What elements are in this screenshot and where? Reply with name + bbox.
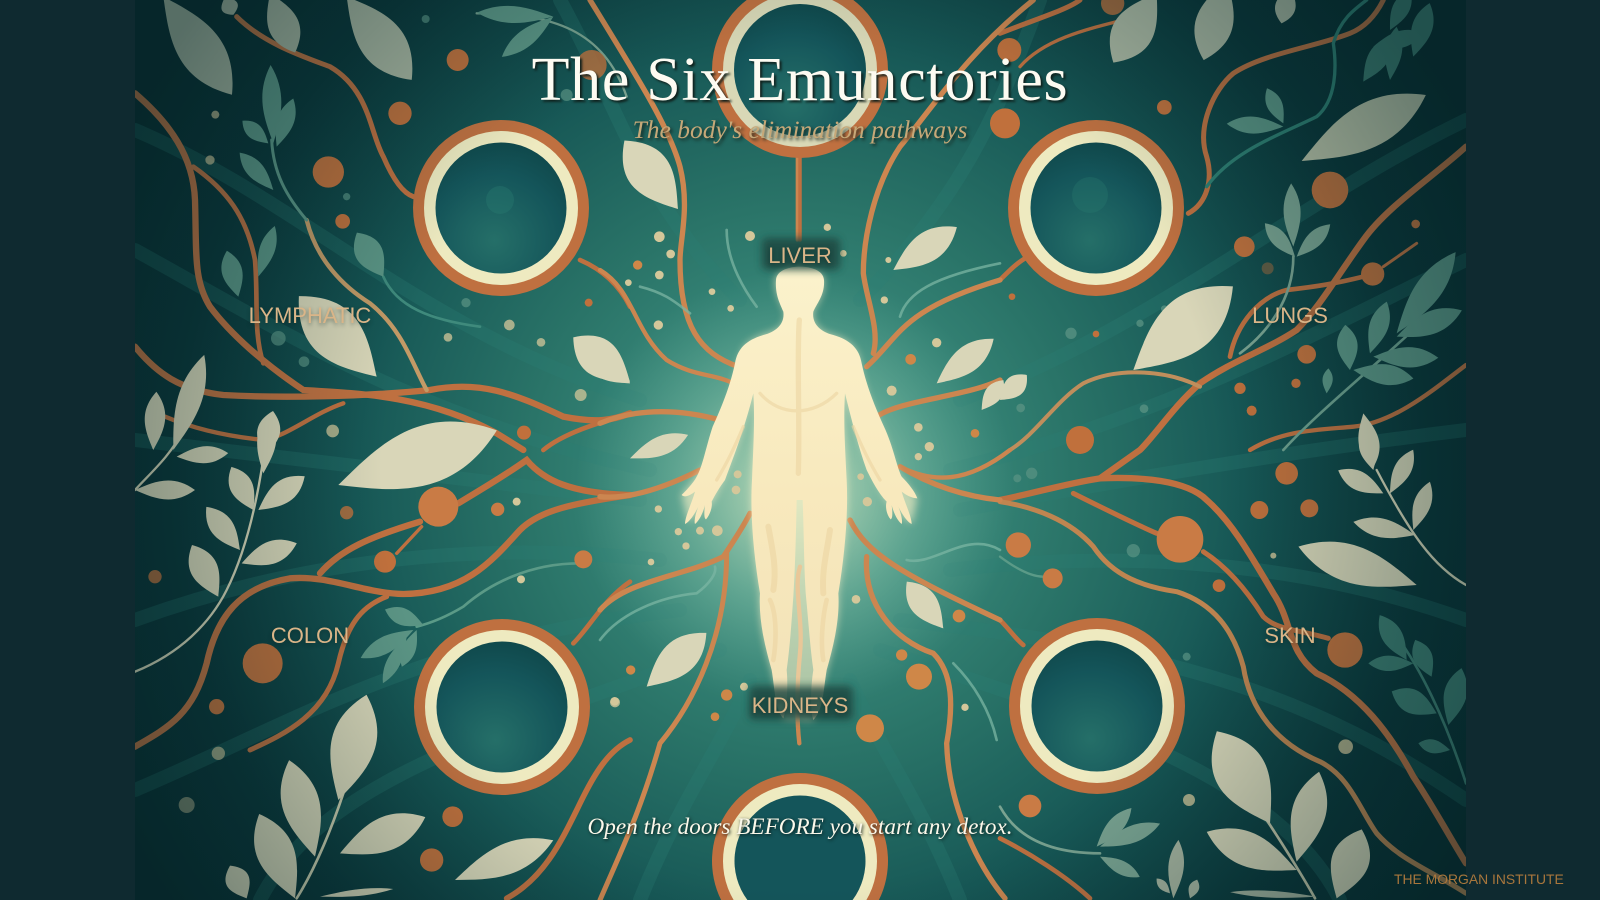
title: The Six Emunctories bbox=[532, 46, 1068, 114]
footer credit: THE MORGAN INSTITUTE bbox=[1394, 871, 1564, 887]
ring: top centre bbox=[712, 0, 888, 158]
ring: bottom centre bbox=[712, 773, 888, 900]
label: colon: COLON bbox=[271, 623, 349, 648]
quadrant: upper right pathways and leaves bbox=[990, 0, 1466, 478]
label: skin: SKIN bbox=[1264, 623, 1316, 648]
subtitle: The body's elimination pathways bbox=[633, 115, 967, 144]
leaf: upper left of head bbox=[622, 140, 678, 209]
dark backing: liver label bbox=[762, 238, 840, 270]
quadrant: lower left pathways and leaves bbox=[135, 403, 630, 900]
tagline: Open the doors BEFORE you start any detox. bbox=[587, 814, 1013, 840]
ring: upper left bbox=[413, 120, 589, 296]
label: kidneys: KIDNEYS bbox=[752, 693, 848, 718]
label: liver: LIVER bbox=[768, 243, 832, 268]
human figure bbox=[682, 267, 917, 720]
centre: radiating vessels, leaves and dots bbox=[577, 0, 1033, 900]
ring: upper right bbox=[1008, 120, 1184, 296]
central glow bbox=[604, 301, 985, 678]
dark backing: kidneys label bbox=[749, 686, 853, 720]
quadrant: lower right pathways and leaves bbox=[1000, 428, 1473, 900]
label: lymphatic: LYMPHATIC bbox=[249, 303, 371, 328]
ring: lower right bbox=[1009, 618, 1185, 794]
quadrant: upper left pathways and leaves bbox=[135, 0, 642, 459]
connector from top ring to liver bbox=[798, 155, 802, 240]
ring: lower left bbox=[414, 619, 590, 795]
label: lungs: LUNGS bbox=[1252, 303, 1328, 328]
body glow halo bbox=[682, 267, 917, 720]
